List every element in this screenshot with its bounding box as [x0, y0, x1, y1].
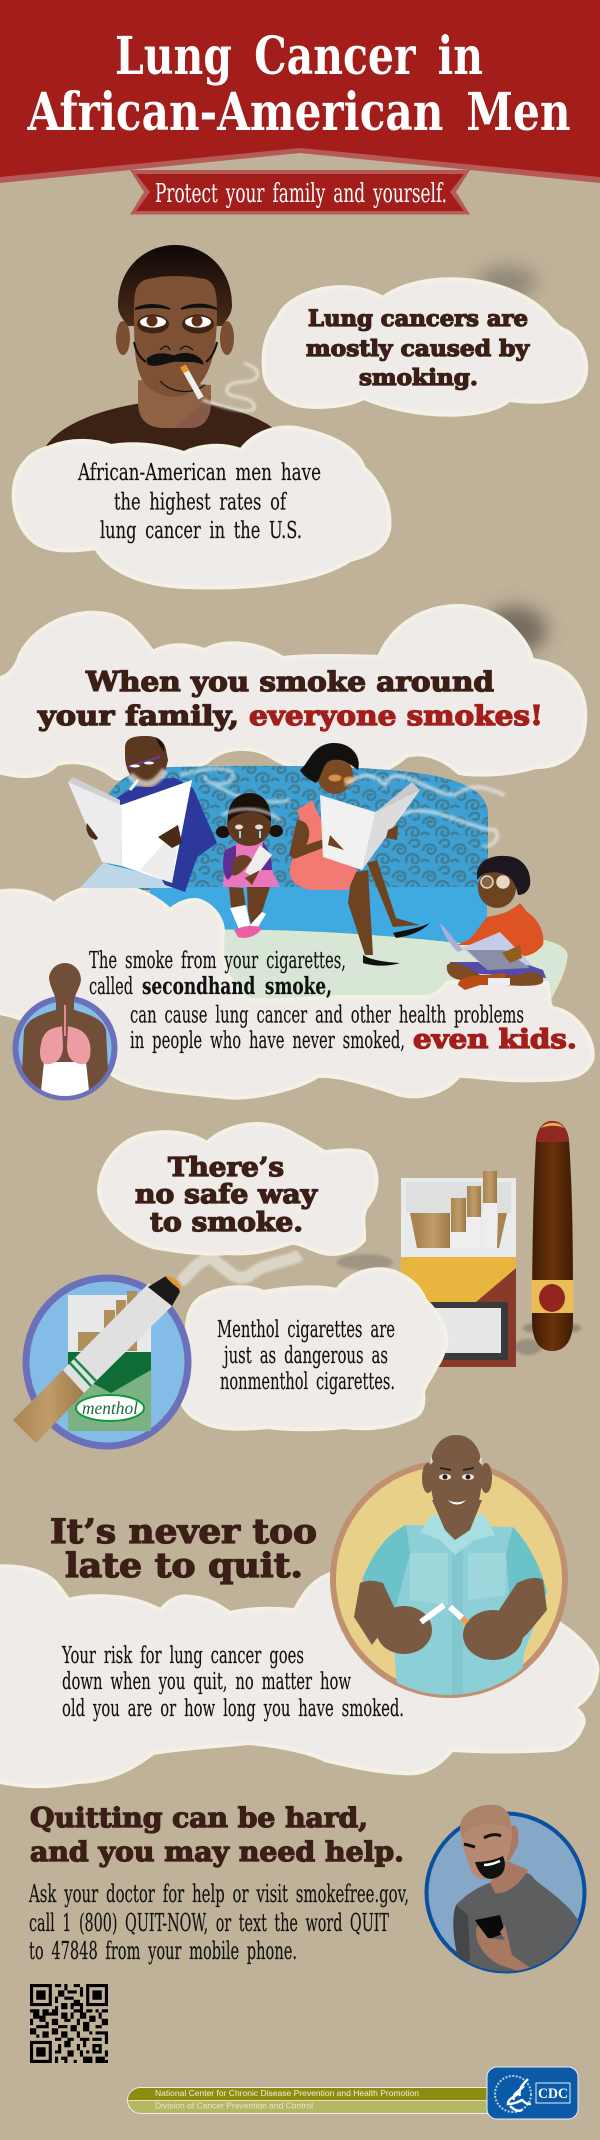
illustration: woman reading newspaper [289, 743, 505, 966]
footer bar [128, 2088, 488, 2114]
heading text: your family, [37, 701, 239, 732]
illustration: older man breaking cigarette [333, 1435, 565, 1700]
shadow: menthol cloud [337, 1254, 393, 1270]
body text: The smoke from your cigarettes, [89, 948, 346, 974]
body text [89, 948, 577, 1055]
menthol pack: menthol [82, 1398, 138, 1418]
icon: menthol cigarette in circle [13, 1276, 188, 1446]
cloud: highest rates [14, 427, 390, 588]
body text: African-American men have [77, 460, 321, 486]
subtitle ribbon [130, 170, 470, 214]
body text: Menthol cigarettes are [217, 1317, 395, 1343]
heading text: Lung cancers are [308, 306, 528, 332]
heading text: mostly caused by [306, 336, 530, 362]
illustration: girl with inhaler [216, 793, 283, 938]
heading text: to smoke. [150, 1208, 303, 1238]
title: Lung Cancer in [115, 26, 483, 87]
heading: quitting can be hard [30, 1803, 404, 1868]
cloud: lungs caused by smoking [264, 279, 586, 415]
heading: never too late: late to quit. [65, 1546, 303, 1586]
heading: quitting can be hard: Quitting can be hard, [30, 1803, 368, 1834]
shadow: cloud one [477, 266, 537, 298]
text: how to get help: to 47848 from your mobile phone. [29, 1937, 297, 1965]
heading text: There’s [168, 1153, 284, 1183]
cloud: when you smoke [0, 606, 585, 779]
footer text [155, 2088, 419, 2110]
header banner [0, 0, 600, 183]
body text [61, 1643, 404, 1722]
body text: Your risk for lung cancer goes [61, 1643, 304, 1669]
body text: called [89, 974, 133, 1000]
text: how to get help [28, 1880, 409, 1965]
heading text [135, 1153, 318, 1238]
title [27, 26, 571, 143]
body text: just as dangerous as [222, 1343, 388, 1369]
body text [77, 460, 321, 544]
QR code [30, 1984, 108, 2063]
body text: even kids. [413, 1025, 577, 1055]
body text: nonmenthol cigarettes. [220, 1369, 395, 1395]
body text: lung cancer in the U.S. [100, 518, 302, 544]
heading text: no safe way [135, 1180, 318, 1210]
cloud: no safe way [99, 1124, 376, 1282]
heading text [37, 667, 543, 732]
sofa and lawn [108, 766, 567, 1010]
body text: old you are or how long you have smoked. [62, 1696, 404, 1722]
cloud: menthol [174, 1269, 446, 1429]
illustration: boy reading book [440, 856, 546, 990]
body text: the highest rates of [114, 490, 287, 516]
footer text: Division of Cancer Prevention and Control [155, 2100, 313, 2110]
menthol pack [68, 1291, 151, 1431]
heading: quitting can be hard: and you may need help. [30, 1837, 404, 1868]
cloud: secondhand smoke [0, 886, 593, 1098]
subtitle ribbon: Protect your family and yourself. [155, 179, 447, 209]
heading text [306, 306, 530, 391]
body text: down when you quit, no matter how [62, 1669, 351, 1695]
footer text: National Center for Chronic Disease Prevention and Health Promotion [155, 2088, 419, 2098]
heading text: everyone smokes! [249, 701, 543, 732]
heading text: When you smoke around [85, 667, 494, 698]
body text [217, 1317, 395, 1395]
illustration: cigar [522, 1121, 582, 1351]
illustration: man reading newspaper [68, 736, 290, 892]
body text: secondhand smoke, [142, 973, 332, 1000]
illustration: man smoking [46, 245, 278, 460]
shadow: family cloud [483, 606, 547, 654]
heading text: smoking. [359, 365, 478, 391]
heading: never too late [50, 1512, 317, 1586]
body text: in people who have never smoked, [130, 1028, 405, 1054]
illustration: man with phone [426, 1805, 590, 1980]
cigarette [13, 1276, 181, 1443]
heading: never too late: It’s never too [50, 1512, 317, 1552]
icon: lungs in circle [16, 963, 114, 1110]
cloud: never too late [0, 1560, 597, 1786]
illustration: cigarette pack [401, 1171, 542, 1367]
logo: CDC [487, 2067, 578, 2119]
CDC wordmark: CDC [538, 2086, 568, 2102]
icon: eagle emblem [495, 2076, 531, 2112]
